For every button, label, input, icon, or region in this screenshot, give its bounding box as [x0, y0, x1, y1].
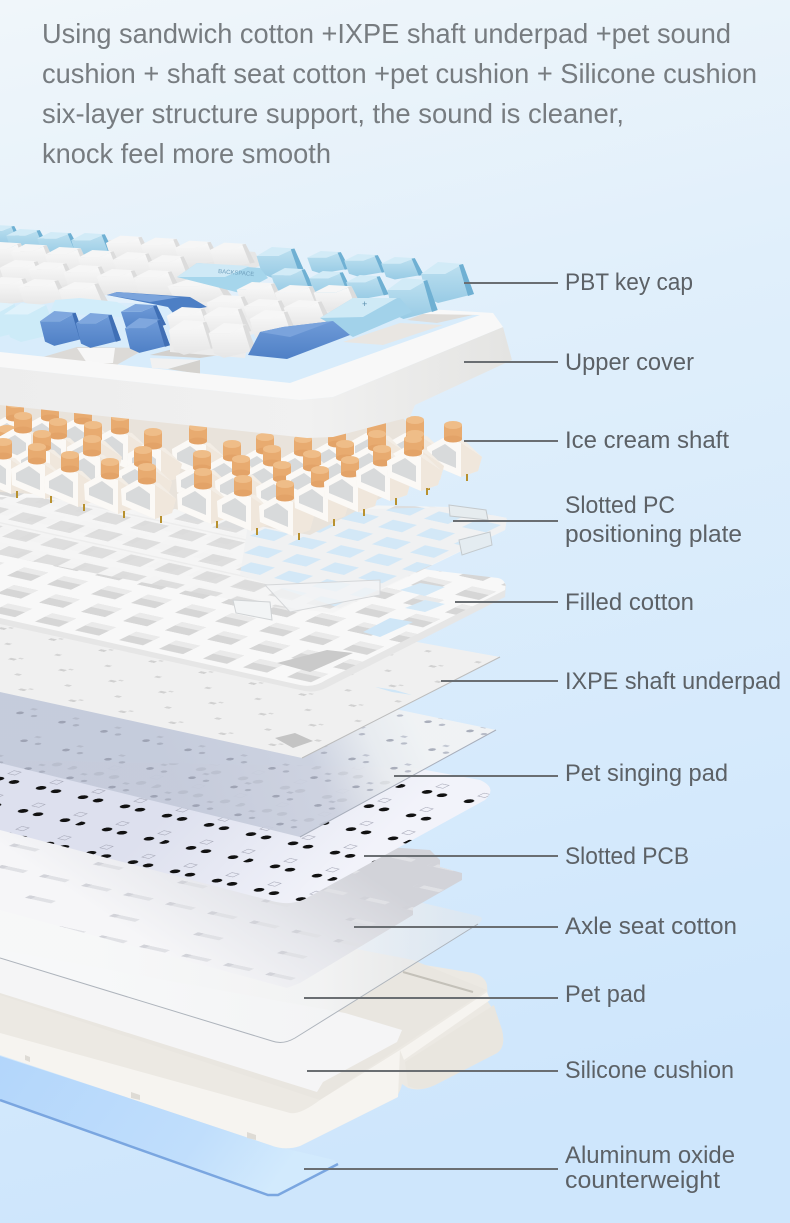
- layer: silicone cushion: [0, 950, 402, 1092]
- callout labels: Ice cream shaft: [565, 427, 729, 454]
- callout labels: Axle seat cotton: [565, 913, 737, 940]
- intro text: knock feel more smooth: [42, 138, 331, 169]
- callout lines: [304, 283, 558, 1169]
- layer: bottom case: [0, 860, 503, 1148]
- layer: slotted PC positioning plate: [0, 497, 507, 620]
- callout labels: Aluminum oxide: [565, 1142, 735, 1169]
- callout labels: Slotted PCB: [565, 843, 689, 870]
- intro text: Using sandwich cotton +IXPE shaft underpad +pet sound: [42, 18, 731, 49]
- layer: ice cream shaft switches: [0, 400, 482, 540]
- callout labels: counterweight: [565, 1167, 720, 1194]
- layer: IXPE shaft underpad: [0, 600, 500, 758]
- intro text: [42, 18, 757, 169]
- intro text: cushion + shaft seat cotton +pet cushion + Silicone cushion: [42, 58, 757, 89]
- callout labels: Filled cotton: [565, 589, 694, 616]
- keycaps: +: [362, 299, 367, 309]
- callout labels: Slotted PC: [565, 492, 675, 519]
- layer: filled cotton: [0, 480, 506, 692]
- callout labels: Pet singing pad: [565, 760, 728, 787]
- layer: axle seat cotton: [0, 820, 462, 988]
- callout labels: [565, 269, 781, 1194]
- callout labels: Upper cover: [565, 349, 694, 376]
- intro text: six-layer structure support, the sound is cleaner,: [42, 98, 624, 129]
- layer: pet pad: [0, 880, 482, 1042]
- callout labels: positioning plate: [565, 521, 742, 548]
- layer: aluminum oxide counterweight: [0, 1056, 338, 1195]
- callout labels: IXPE shaft underpad: [565, 668, 781, 695]
- layer: upper cover: [0, 300, 512, 438]
- keycaps: BACKSPACE: [218, 269, 254, 278]
- callout labels: PBT key cap: [565, 269, 693, 296]
- keycaps: [0, 225, 474, 359]
- layer: slotted PCB: [0, 760, 490, 903]
- callout labels: Silicone cushion: [565, 1057, 734, 1084]
- callout labels: Pet pad: [565, 981, 646, 1008]
- layer: pet singing pad: [0, 680, 496, 837]
